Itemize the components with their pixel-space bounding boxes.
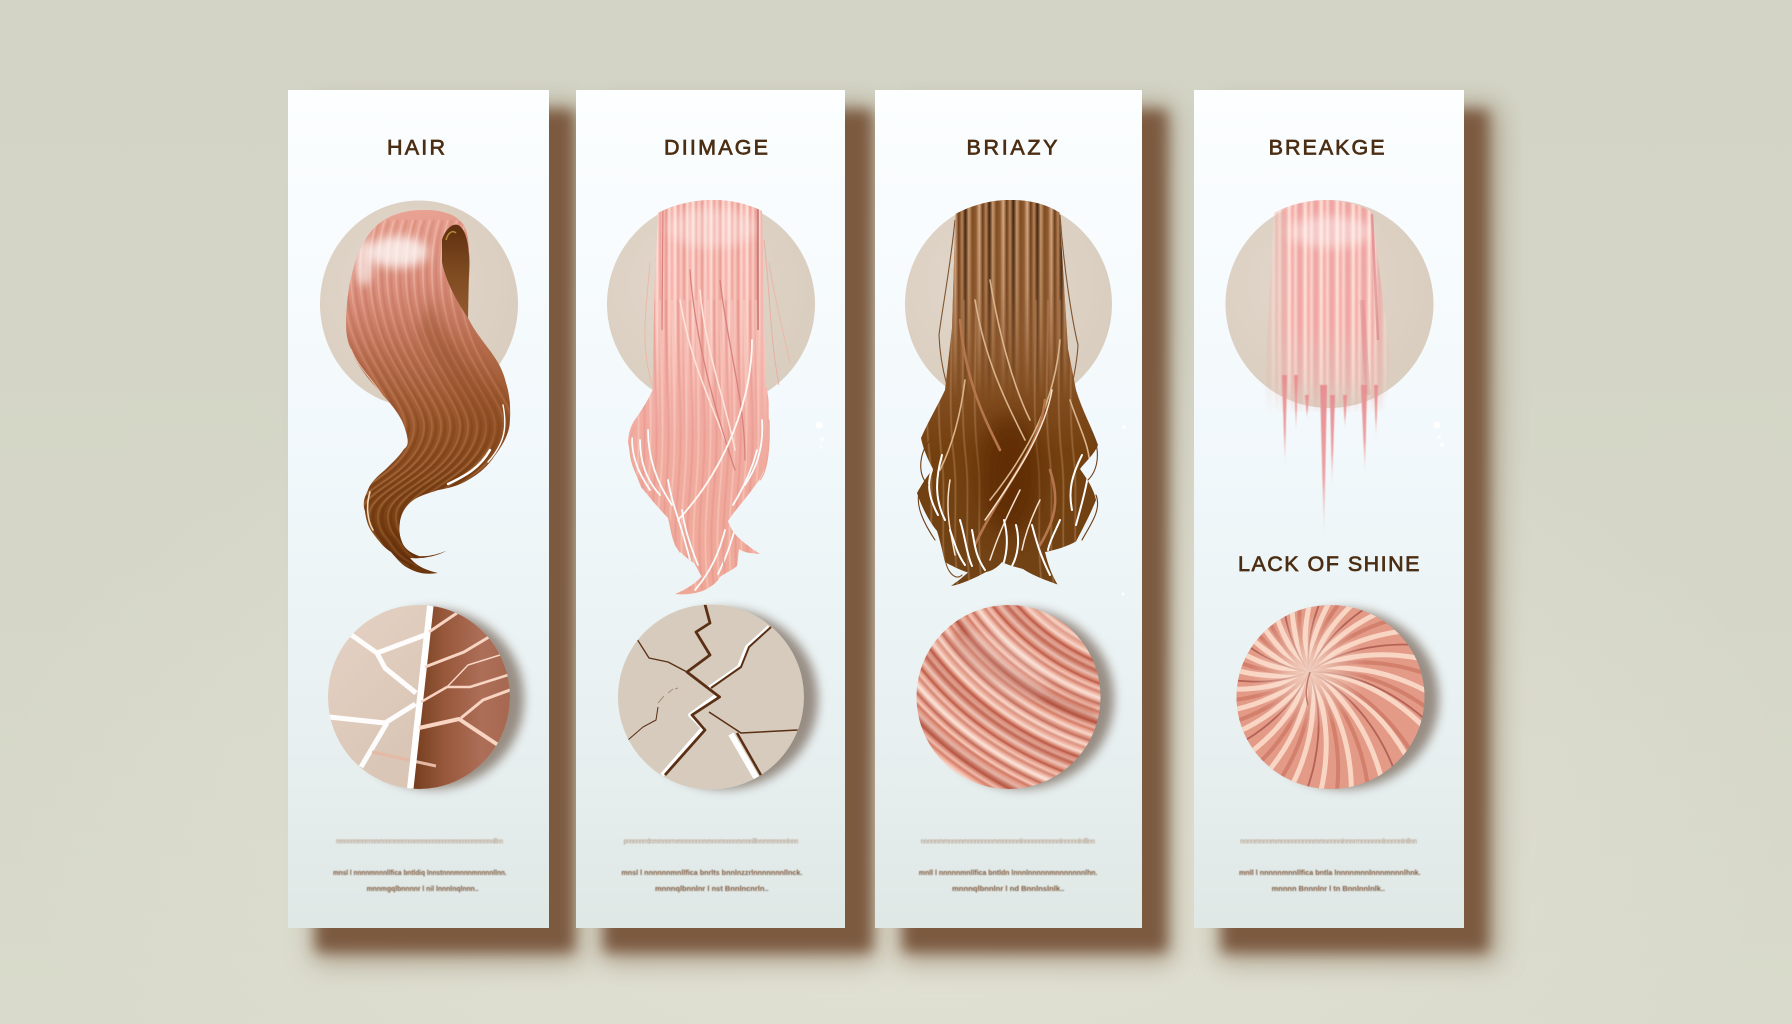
subheading: LACK OF SHINE bbox=[1238, 552, 1420, 576]
icon: cracked disc bbox=[618, 603, 818, 790]
card bbox=[1194, 90, 1464, 928]
caption: mnnnn Bnnnlnr l tn Bnnlnnlnlk.. bbox=[1272, 886, 1385, 893]
icon: striped hair disc bbox=[916, 604, 1114, 790]
panel shadow bbox=[1218, 106, 1498, 962]
panel: frizzy bbox=[875, 90, 1172, 962]
beige circle bbox=[1226, 200, 1434, 408]
panel: breakage and lack of shine bbox=[1170, 90, 1498, 962]
dots bbox=[1122, 425, 1126, 596]
dots bbox=[816, 422, 824, 448]
icon: cracked strand disc bbox=[328, 603, 524, 791]
beige circle bbox=[607, 200, 815, 408]
caption: mnll l nnnnnmnnllfica bntla lnnnnmnnlnnnmnnnlhnk. bbox=[1239, 870, 1421, 877]
heading: HAIR bbox=[387, 136, 445, 160]
caption: mmnnnmmnrrnnmmnnrnmmnnnnnmmnnmnnnnmmnnnnnmmmnnnlllnn bbox=[336, 838, 503, 846]
heading: BREAKGE bbox=[1269, 136, 1385, 160]
panel: damage bbox=[576, 90, 876, 962]
card bbox=[576, 90, 845, 928]
caption: mnnnqlbnnlnr l nst Bnnlncnrln.. bbox=[655, 886, 769, 893]
caption: mnnnqlbnnlnr l nd Bnnlnslnlk.. bbox=[952, 886, 1064, 893]
beige circle bbox=[905, 200, 1112, 408]
panel shadow bbox=[314, 106, 580, 962]
heading: BRIAZY bbox=[966, 136, 1058, 160]
caption: nnnnnmmnnnnmnnnnnnnmmnnnnnlnnnnnnnnnnnlnnnnnlnlllnn bbox=[921, 838, 1095, 846]
caption: mnsl l nnnnmnnnllfica bntldiq lnnstnnnmnnnmnnnnllnn. bbox=[333, 870, 507, 877]
panel shadow bbox=[900, 106, 1172, 962]
panel: hair bbox=[288, 90, 580, 962]
heading: DIIMAGE bbox=[664, 136, 768, 160]
caption: pnnnnnrrdnmmnnrrnmmnnnnnmmnnmnnnnmmnnlllnnmmmnnnlnnn bbox=[624, 838, 798, 846]
card bbox=[288, 90, 549, 928]
caption bbox=[919, 838, 1098, 893]
dots bbox=[1434, 422, 1444, 447]
beige circle bbox=[320, 200, 518, 408]
illustration: brown frizzy hair bbox=[917, 198, 1098, 590]
caption: nnnnmnnnmmnnnnnnnnnmmnnnnnlnnnrrnnnnnnnlnnnnnlnllnn bbox=[1240, 838, 1417, 846]
illustration: glossy hair lock bbox=[346, 210, 510, 574]
card bbox=[875, 90, 1142, 928]
caption bbox=[1239, 838, 1421, 893]
icon: hair crown swirl disc bbox=[1236, 602, 1446, 796]
caption: mnll l nnnnnmnllfica bntldn lnnnlnnnnnmnnnnnnnlhn. bbox=[919, 870, 1098, 877]
illustration: thin broken pink hair bbox=[1265, 200, 1390, 540]
panel shadow bbox=[602, 106, 876, 962]
caption: mnsl l nnnnnnmnllfica bnrlts bnnlnzzrlnnnnnnnllnck. bbox=[621, 870, 802, 877]
caption bbox=[333, 838, 507, 893]
caption: mnnmgqlbnnnnr l nil lnnnlnqlnnn.. bbox=[367, 886, 479, 893]
caption bbox=[621, 838, 802, 893]
illustration: pink damaged hair bbox=[628, 198, 790, 594]
